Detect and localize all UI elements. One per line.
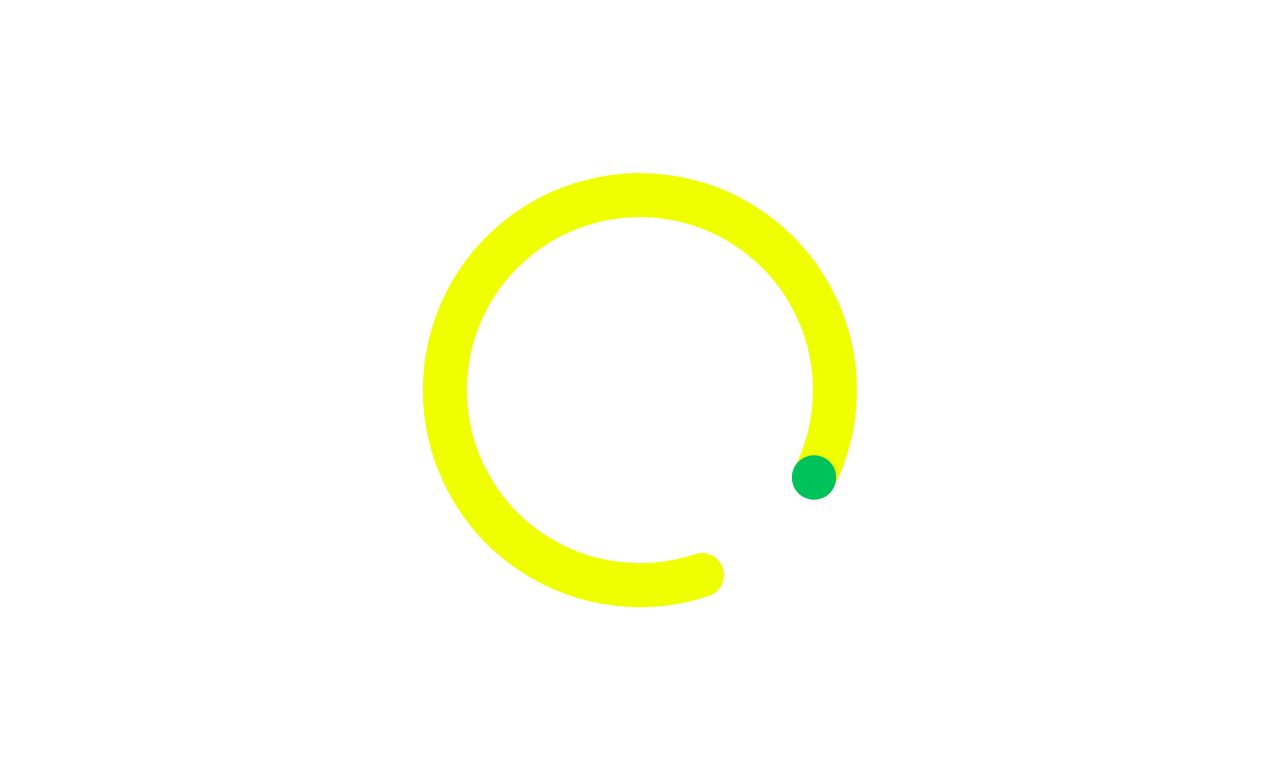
green marker dot: [792, 455, 836, 500]
yellow progress arc: [445, 195, 835, 585]
